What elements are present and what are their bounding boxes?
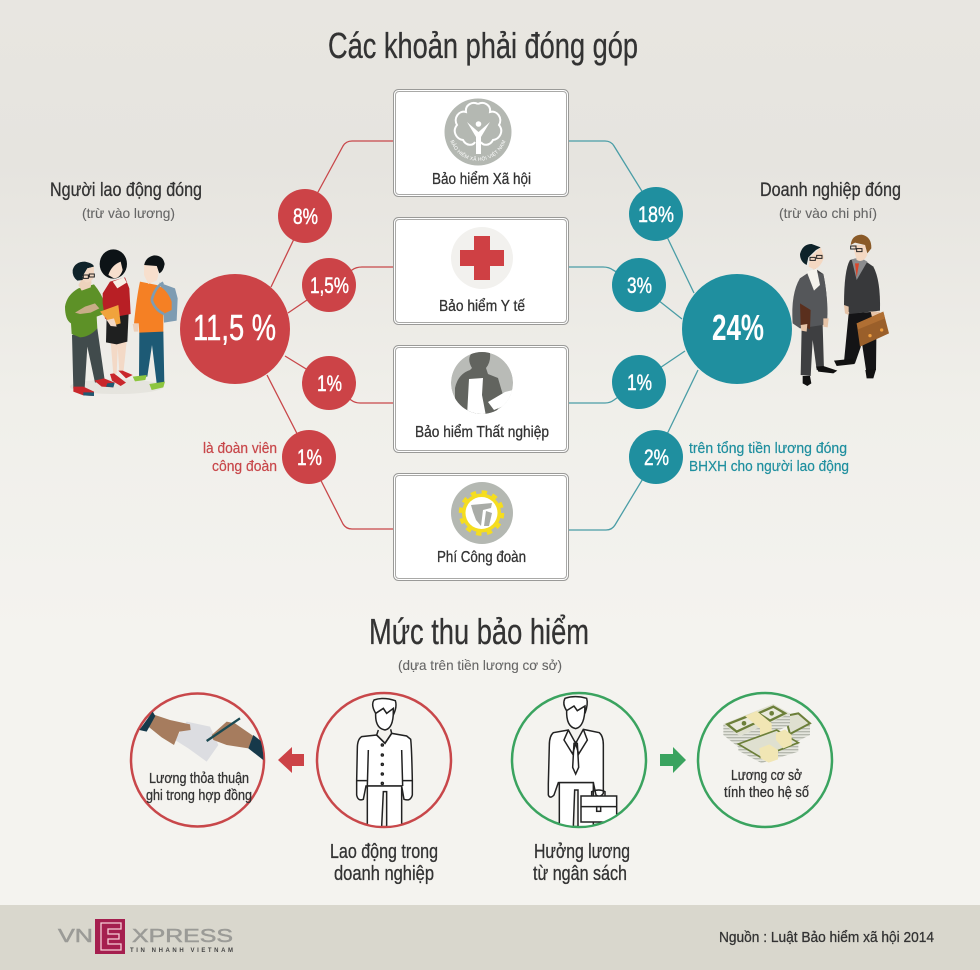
badge: unemployment employer 1%: 1% [627,370,652,395]
panel: employee contributions heading [50,179,202,221]
label [146,770,252,804]
logo: VnExpress: VN [58,926,93,946]
label: tính theo hệ số [724,785,809,801]
icon: unemployed person [451,351,513,416]
label: state budget employees: Hưởng lương [534,841,630,863]
badge: union fee employer 2%: 2% [644,445,669,470]
badge: social insurance employee 8% [278,189,332,243]
icon: union gear logo [451,482,513,544]
badge: unemployment employee 1% [302,356,356,410]
logo: VnExpress: TIN NHANH VIETNAM [130,948,233,954]
badge: health insurance employee 1,5% [302,258,356,312]
note: deducted from salary: (trừ vào lương) [82,205,175,221]
label: Bảo hiểm Y tế [439,297,525,315]
icon: worker outline [357,698,412,827]
note: deducted from expenses: (trừ vào chi phí) [779,205,877,221]
label: Lương cơ sở [731,768,802,784]
panel: union fee [394,474,568,580]
heading: employer: Doanh nghiệp đóng [760,179,901,201]
heading: employee: Người lao động đóng [50,179,202,201]
logo: VnExpress: XPRESS [132,926,233,946]
illustration: three students [65,249,178,396]
icon: red cross [451,227,513,289]
title: main heading: Các khoản phải đóng góp [328,25,638,66]
label: enterprise workers: Lao động trong [330,841,438,863]
badge: union fee employer 2% [629,430,683,484]
illustration: money stacks [723,704,810,763]
heading: contribution base: Mức thu bảo hiểm [369,611,589,652]
panel: social insurance [393,89,569,197]
label: state budget employees: từ ngân sách [533,863,627,885]
footer band [0,905,980,970]
label: enterprise workers: doanh nghiệp [334,863,434,885]
big circle: employer total: 24% [712,307,764,348]
circle: enterprise worker [317,693,451,827]
label: Bảo hiểm Xã hội [432,170,531,188]
label: Bảo hiểm Thất nghiệp [415,423,549,441]
note: based on base salary: (dựa trên tiền lương cơ sở) [398,657,562,673]
illustration: hands signing contract [139,712,264,762]
note: employer basis: BHXH cho người lao động [689,459,849,475]
source note: Nguồn : Luật Bảo hiểm xã hội 2014 [719,929,934,946]
panel: employer contributions heading [760,179,901,221]
note: union member: công đoàn [212,459,277,475]
circle: state budget employee [512,693,646,827]
panel: health insurance [394,218,568,324]
circle: negotiated salary [131,694,264,826]
badge: health insurance employer 3% [612,258,666,312]
note: union member: là đoàn viên [203,441,277,457]
badge: union fee employee 1%: 1% [297,445,322,470]
circle: base salary [698,693,832,827]
icon: official outline with briefcase [548,697,617,827]
badge: social insurance employer 18%: 18% [638,202,674,227]
connector lines: employee side [267,141,393,529]
connector lines: employer side [569,141,698,530]
arrow: red left [278,747,304,773]
label: enterprise workers [330,841,438,885]
badge: union fee employee 1% [282,430,336,484]
label [724,768,809,801]
label: ghi trong hợp đồng [146,787,252,804]
badge: health insurance employee 1,5%: 1,5% [310,273,349,298]
big circle: employer total [682,274,792,384]
note: union member [203,441,277,475]
badge: social insurance employee 8%: 8% [293,204,318,229]
badge: health insurance employer 3%: 3% [627,273,652,298]
panel: unemployment insurance [394,346,568,452]
label: Lương thỏa thuận [149,770,249,787]
big circle: employee total [180,274,290,384]
note: employer basis: trên tổng tiền lương đóng [689,441,847,457]
illustration: two businessmen [792,235,889,386]
label: Phí Công đoàn [437,549,526,566]
badge: unemployment employer 1% [612,355,666,409]
icon: social insurance logo: BẢO HIỂM XÃ HỘI VIỆT NAM [450,140,506,161]
icon: social insurance logo [444,98,512,166]
label: state budget employees [533,841,630,885]
big circle: employee total: 11,5 % [193,307,276,348]
badge: unemployment employee 1%: 1% [317,371,342,396]
arrow: green right [660,747,686,773]
note: employer basis [689,441,849,475]
badge: social insurance employer 18% [629,187,683,241]
logo: VnExpress [58,919,233,954]
